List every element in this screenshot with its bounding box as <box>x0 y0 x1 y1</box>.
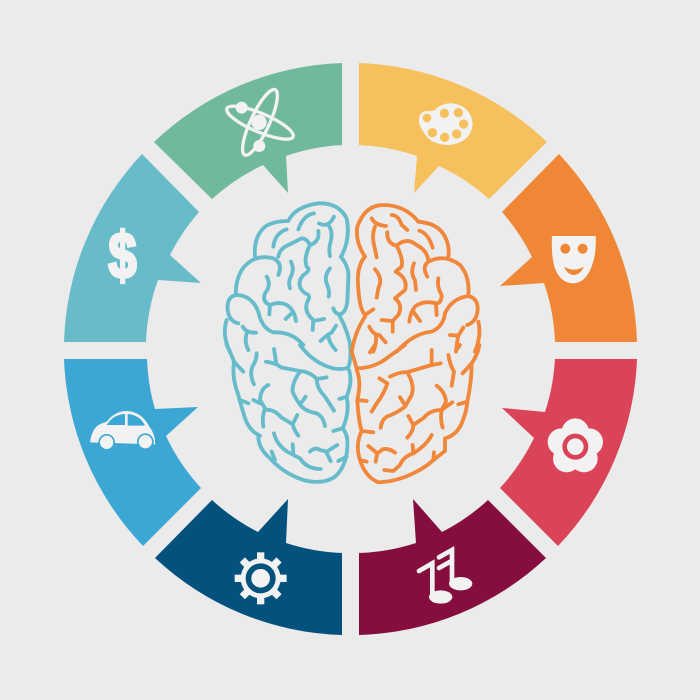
left brain lower half <box>227 345 351 482</box>
segment: orange speech arc <box>500 154 637 342</box>
icon: theatre mask <box>552 236 596 283</box>
segment: navy speech arc <box>155 499 342 635</box>
right brain upper half <box>352 205 479 352</box>
panel: engineering <box>155 499 342 635</box>
panel: science <box>154 63 342 199</box>
left brain upper half <box>225 203 352 352</box>
icon: car <box>90 411 155 451</box>
segment: maroon speech arc <box>359 499 546 635</box>
right brain lower half <box>352 345 479 482</box>
segment: teal speech arc <box>64 154 201 342</box>
panel: theatre <box>500 154 637 342</box>
segment: yellow speech arc <box>359 63 547 199</box>
segment: red speech arc <box>500 359 637 546</box>
icon: gear <box>235 552 287 604</box>
icon: atom <box>223 86 297 159</box>
brain: left hemisphere <box>225 203 352 482</box>
panel: transport <box>64 359 201 546</box>
icon: flower <box>548 418 603 472</box>
panel: finance <box>64 154 201 342</box>
panel: nature <box>500 359 637 546</box>
icon: dollar sign: $ <box>108 220 137 292</box>
brain: right hemisphere <box>352 205 479 482</box>
panel: music <box>359 499 546 635</box>
panel: art <box>359 63 547 199</box>
segment: green speech arc <box>154 63 342 199</box>
icon: paint palette <box>419 103 473 145</box>
icon: music notes <box>419 550 472 604</box>
segment: blue speech arc <box>64 359 201 546</box>
